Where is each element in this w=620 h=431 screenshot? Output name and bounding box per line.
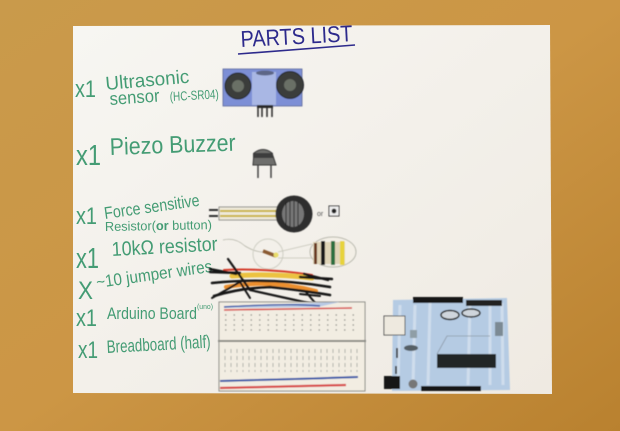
item: 10k ohm resistor label	[76, 233, 218, 275]
item: force sensitive resistor label	[76, 191, 212, 234]
item: 10k ohm resistor label: 10kΩ resistor	[111, 233, 218, 261]
item: force sensitive resistor label: x1	[76, 203, 97, 230]
item: Arduino board label	[76, 304, 213, 332]
item: ultrasonic sensor label: sensor	[109, 86, 160, 109]
item: piezo buzzer label: x1	[76, 140, 101, 172]
item: force sensitive resistor label: Force sensitive	[103, 191, 201, 223]
item: force sensitive resistor label: Resistor(or button)	[105, 217, 212, 234]
icon: force sensitive resistor and button	[209, 196, 339, 232]
item: ultrasonic sensor label: Ultrasonic	[105, 67, 190, 95]
item: jumper wires label	[78, 257, 213, 305]
item: jumper wires label: X	[78, 277, 93, 305]
paper sheet	[73, 25, 552, 394]
item: breadboard label: Breadboard (half)	[106, 332, 211, 357]
item: piezo buzzer label: Piezo Buzzer	[109, 130, 236, 161]
icon: breadboard	[218, 302, 366, 391]
icon: ultrasonic sensor	[223, 69, 304, 117]
icon: piezo buzzer	[253, 150, 276, 178]
icon: jumper wires	[210, 259, 332, 306]
item: jumper wires label: ~10 jumper wires	[95, 257, 213, 292]
icon: force sensitive resistor and button: or	[317, 211, 324, 218]
item: Arduino board label: x1	[76, 305, 97, 332]
title: PARTS LIST	[240, 20, 353, 52]
item: ultrasonic sensor label	[75, 67, 219, 109]
item: 10k ohm resistor label: x1	[76, 243, 99, 275]
item: breadboard label	[78, 332, 211, 364]
item: Arduino board label: (uno)	[197, 304, 213, 311]
icon: Arduino board	[384, 297, 510, 391]
icon: resistor with magnified view	[223, 237, 356, 269]
item: ultrasonic sensor label: x1	[75, 76, 96, 103]
item: piezo buzzer label	[76, 130, 236, 172]
item: ultrasonic sensor label: (HC-SR04)	[169, 86, 219, 104]
item: Arduino board label: Arduino Board	[107, 304, 197, 323]
item: breadboard label: x1	[78, 337, 98, 364]
